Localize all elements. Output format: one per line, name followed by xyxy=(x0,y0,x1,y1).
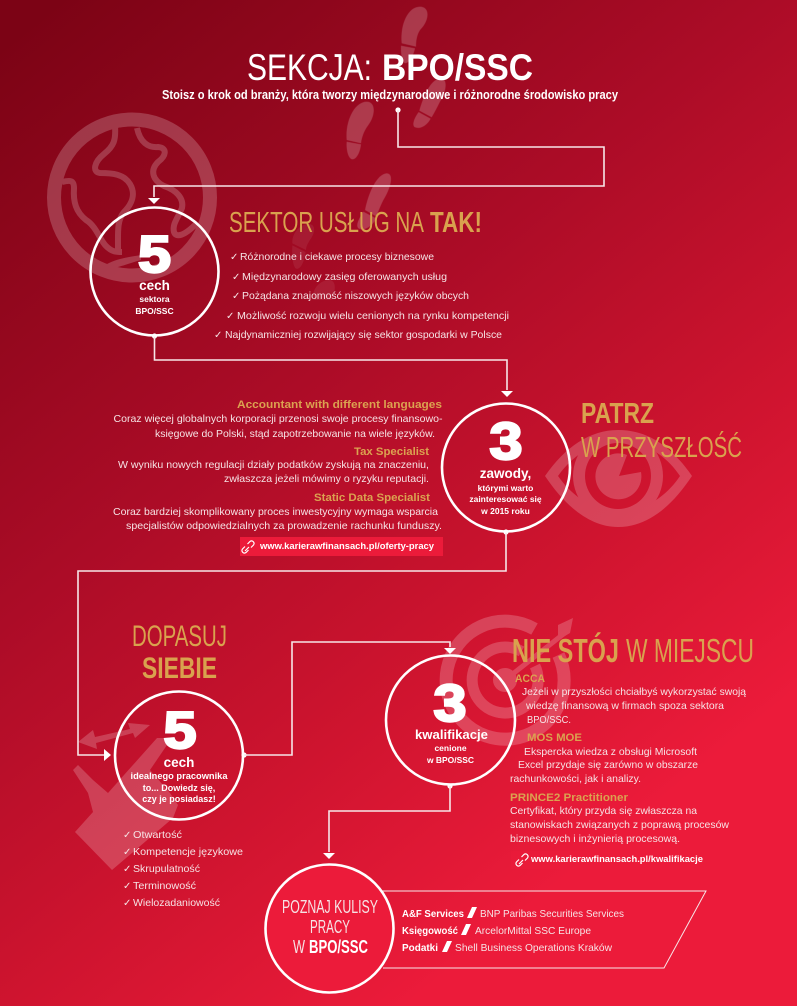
heading: patrz w przyszłość xyxy=(581,398,742,464)
text block: zawody: Tax Specialist xyxy=(354,446,429,458)
icon: footprints watermark xyxy=(292,7,446,300)
circle: 5 cech pracownika: cech xyxy=(164,755,194,770)
heading: sektor usług na tak: TAK! xyxy=(430,207,482,239)
text block: zawody: księgowe do Polski, stąd zapotrzebowanie na wiele języków. xyxy=(155,428,435,440)
text block: kwalifikacje: Certyfikat, który przyda się zwłaszcza na xyxy=(510,805,697,817)
icon: target watermark xyxy=(446,618,573,739)
heading: dopasuj siebie: SIEBIE xyxy=(142,652,217,685)
checklist: cechy sektora: Międzynarodowy zasięg oferowanych usług xyxy=(242,271,447,283)
link: oferty pracy xyxy=(240,537,443,556)
circle: 3 kwalifikacje: cenione xyxy=(434,743,467,753)
checklist: cechy pracownika: ✓ xyxy=(123,898,131,909)
text block: kwalifikacje: Jeżeli w przyszłości chciałbyś wykorzystać swoją xyxy=(522,686,746,698)
text block: kwalifikacje: ACCA xyxy=(515,673,545,685)
text block: kwalifikacje: rachunkowości, jak i analizy. xyxy=(510,773,641,785)
circle: 3 kwalifikacje: kwalifikacje xyxy=(415,728,488,742)
connector: circle 2 to circle 3 xyxy=(78,529,509,761)
checklist: cechy pracownika: ✓ xyxy=(123,830,131,841)
heading: dopasuj siebie xyxy=(132,620,227,685)
text block: zawody: W wyniku nowych regulacji działy podatków zyskują na znaczeniu, xyxy=(118,459,429,471)
checklist: cechy sektora: ✓ xyxy=(226,311,234,322)
circle: 3 kwalifikacje: 3 xyxy=(434,675,466,733)
heading: sektor usług na tak: SEKTOR USŁUG NA xyxy=(229,207,424,239)
checklist: cechy pracownika xyxy=(123,829,243,909)
circle: 5 cech sektora xyxy=(90,208,218,336)
panel: firmy: Podatki xyxy=(402,942,438,954)
circle: 5 cech pracownika xyxy=(115,692,243,820)
icon: globe watermark xyxy=(54,120,210,276)
checklist: cechy pracownika: Otwartość xyxy=(133,829,182,841)
icon: eye watermark xyxy=(545,430,692,527)
circle: 5 cech pracownika: czy je posiadasz! xyxy=(142,794,216,804)
connector: circle 3 to circle 4 xyxy=(241,642,456,758)
title: SEKCJA: xyxy=(247,47,372,88)
circle: 5 cech sektora: BPO/SSC xyxy=(135,306,174,316)
checklist: cechy sektora: Pożądana znajomość niszowych języków obcych xyxy=(242,290,469,302)
icon: hand watermark xyxy=(73,738,178,870)
circle: 3 kwalifikacje: w BPO/SSC xyxy=(426,755,474,765)
checklist: cechy pracownika: ✓ xyxy=(123,864,131,875)
panel: firmy: Shell Business Operations Kraków xyxy=(455,942,612,954)
connector: circle 4 to circle 5 xyxy=(323,783,453,859)
checklist: cechy sektora xyxy=(214,251,509,341)
text block: kwalifikacje xyxy=(510,673,746,845)
checklist: cechy sektora: Możliwość rozwoju wielu cenionych na rynku kompetencji xyxy=(237,310,509,322)
heading: dopasuj siebie: DOPASUJ xyxy=(132,620,227,653)
circle: poznaj kulisy: PRACY xyxy=(310,917,350,937)
link: oferty pracy: www.karierawfinansach.pl/oferty-pracy xyxy=(259,541,435,552)
text block: kwalifikacje: biznesowych i inżynierią procesową. xyxy=(510,833,680,845)
circle: poznaj kulisy: BPO/SSC xyxy=(309,937,368,957)
circle: 5 cech sektora: sektora xyxy=(139,294,170,304)
checklist: cechy sektora: Najdynamiczniej rozwijający się sektor gospodarki w Polsce xyxy=(225,329,502,341)
checklist: cechy sektora: ✓ xyxy=(232,272,240,283)
text block: kwalifikacje: MOS MOE xyxy=(527,732,582,744)
title xyxy=(247,47,533,88)
text block: zawody: Coraz więcej globalnych korporacji przenosi swoje procesy finansowo- xyxy=(114,413,443,425)
text block: zawody: Accountant with different languages xyxy=(237,399,442,411)
circle: 5 cech pracownika: 5 xyxy=(164,702,196,760)
circle: 3 zawody xyxy=(442,404,570,532)
circle: 3 zawody: którymi warto xyxy=(478,483,533,493)
circle: 5 cech sektora: 5 xyxy=(138,226,171,284)
text block: zawody: Static Data Specialist xyxy=(314,492,430,504)
checklist: cechy pracownika: ✓ xyxy=(123,881,131,892)
connector: circle 1 to circle 2 xyxy=(152,333,513,397)
text block: zawody: Coraz bardziej skomplikowany proces inwestycyjny wymaga wsparcia xyxy=(113,506,438,518)
circle: poznaj kulisy xyxy=(266,864,394,992)
panel: firmy xyxy=(382,891,706,968)
circle: poznaj kulisy: POZNAJ KULISY xyxy=(282,897,378,917)
connector: title to circle 1 xyxy=(148,107,604,204)
text block: zawody xyxy=(113,399,443,532)
text block: kwalifikacje: stanowiskach związanych z poprawą procesów xyxy=(510,819,729,831)
checklist: cechy pracownika: Wielozadaniowość xyxy=(133,897,220,909)
circle: poznaj kulisy: W xyxy=(293,937,305,957)
checklist: cechy pracownika: Skrupulatność xyxy=(133,863,200,875)
title: BPO/SSC xyxy=(382,47,533,88)
heading: nie stój w miejscu: NIE STÓJ xyxy=(512,632,619,669)
text block: kwalifikacje: BPO/SSC. xyxy=(527,714,571,726)
text block: kwalifikacje: Excel przydaje się zarówno w obszarze xyxy=(518,759,698,771)
checklist: cechy sektora: Różnorodne i ciekawe procesy biznesowe xyxy=(240,251,434,263)
circle: 3 zawody: zainteresować się xyxy=(469,494,542,504)
text block: kwalifikacje: PRINCE2 Practitioner xyxy=(510,792,629,804)
circle: 3 zawody: zawody, xyxy=(480,466,531,481)
circle: 3 kwalifikacje xyxy=(386,656,515,784)
text block: kwalifikacje: Ekspercka wiedza z obsługi Microsoft xyxy=(524,746,697,758)
link: kwalifikacje xyxy=(511,851,711,869)
circle: 3 zawody: w 2015 roku xyxy=(480,506,530,516)
heading: nie stój w miejscu xyxy=(512,632,754,669)
circle: 5 cech pracownika: to... Dowiedz się, xyxy=(143,783,215,793)
panel: firmy: ArcelorMittal SSC Europe xyxy=(475,925,591,937)
panel: firmy: BNP Paribas Securities Services xyxy=(480,908,624,920)
heading: patrz w przyszłość: PATRZ xyxy=(581,398,654,430)
checklist: cechy sektora: ✓ xyxy=(214,330,222,341)
checklist: cechy pracownika: ✓ xyxy=(123,847,131,858)
checklist: cechy sektora: ✓ xyxy=(230,252,238,263)
link: kwalifikacje: www.karierawfinansach.pl/kwalifikacje xyxy=(530,854,703,865)
circle: 5 cech pracownika: idealnego pracownika xyxy=(130,771,229,781)
icon: double arrow watermark xyxy=(78,723,150,749)
circle: 3 zawody: 3 xyxy=(490,413,522,471)
text block: zawody: specjalistów odpowiedzialnych za prowadzenie rachunku funduszy. xyxy=(126,520,442,532)
subtitle: Stoisz o krok od branży, która tworzy międzynarodowe i różnorodne środowisko pracy xyxy=(162,87,619,102)
circle: 5 cech sektora: cech xyxy=(139,278,170,293)
text block: kwalifikacje: wiedzę finansową w firmach spoza sektora xyxy=(525,700,724,712)
checklist: cechy pracownika: Kompetencje językowe xyxy=(133,846,243,858)
checklist: cechy pracownika: Terminowość xyxy=(133,880,196,892)
text block: zawody: zwłaszcza jeżeli mówimy o ryzyku reputacji. xyxy=(224,473,429,485)
panel: firmy: Księgowość xyxy=(402,925,458,937)
panel: firmy: A&F Services xyxy=(402,908,464,920)
checklist: cechy sektora: ✓ xyxy=(232,291,240,302)
